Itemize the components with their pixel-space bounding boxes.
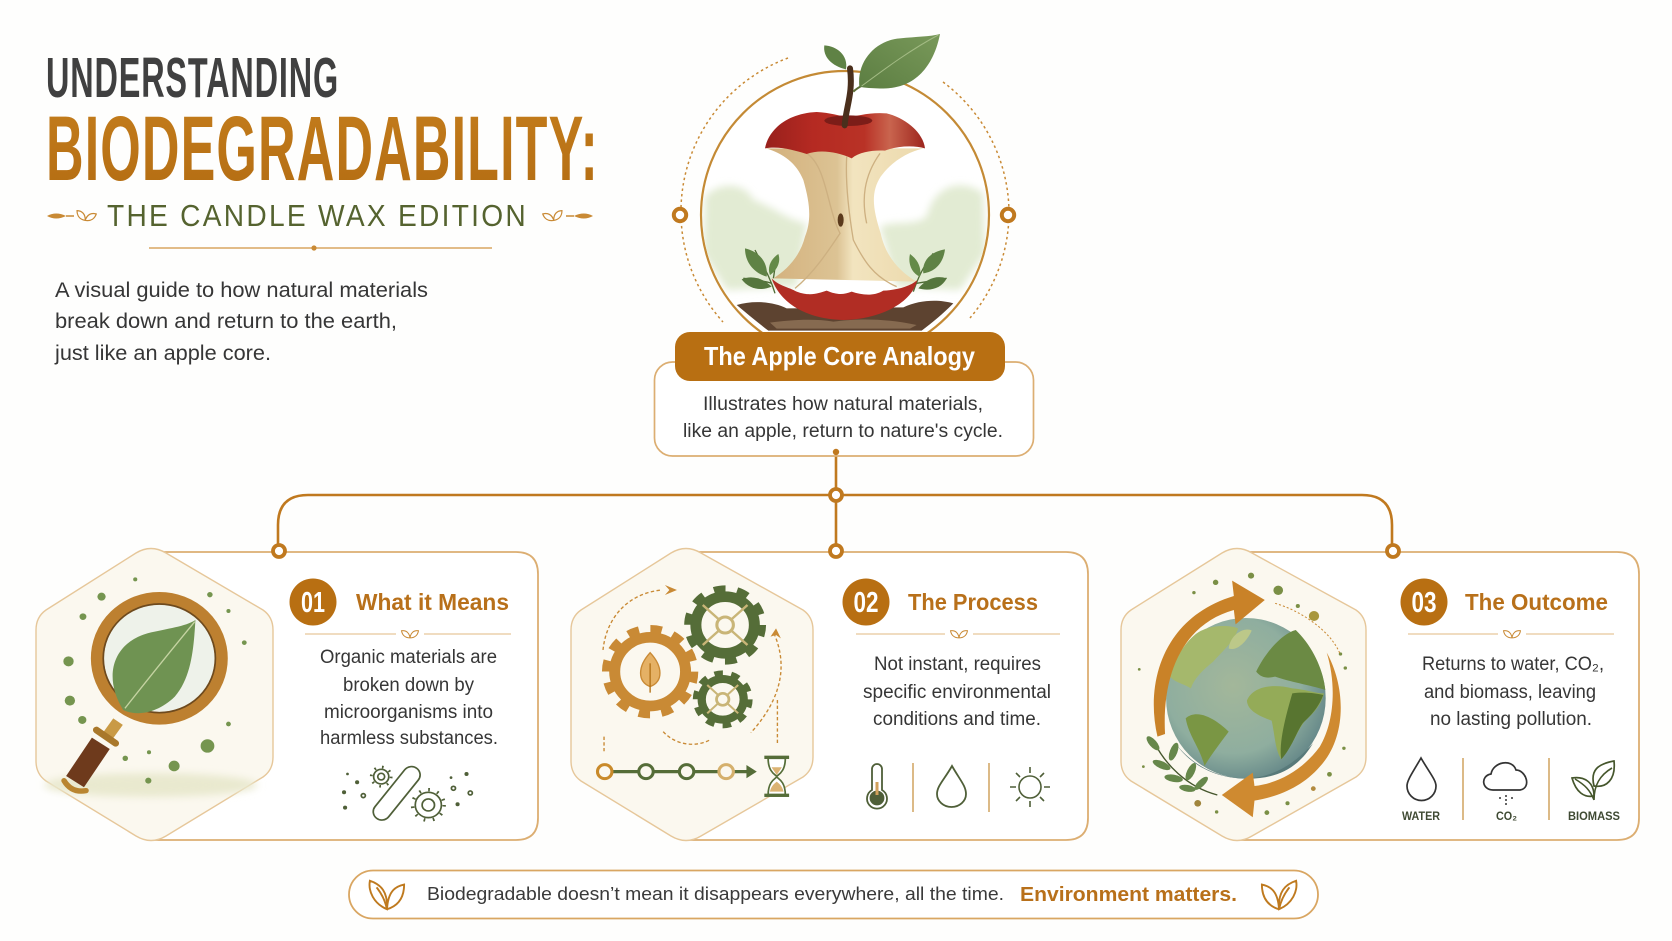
icon: biomass plant: BIOMASS (1568, 809, 1620, 823)
footer icon right (1262, 881, 1296, 909)
footer callout (349, 870, 1318, 918)
icon: sun (1010, 767, 1050, 807)
footer emphasis: Environment matters. (1020, 884, 1237, 906)
panel: the outcome (1121, 548, 1639, 840)
connector dot (833, 449, 839, 455)
subtitle ornament left (47, 211, 96, 222)
dark green gear (688, 589, 762, 661)
body text: microorganisms into (324, 702, 493, 723)
apple circle frame (674, 58, 1014, 359)
illustration: gears and timeline (597, 585, 789, 797)
footer text: Biodegradable doesn’t mean it disappears everywhere, all the time. (427, 883, 1004, 904)
intro paragraph: just like an apple core. (54, 342, 271, 365)
caption text: Illustrates how natural materials, (703, 394, 983, 415)
caption text (683, 394, 1003, 442)
leaf (113, 620, 195, 713)
soil (737, 301, 953, 331)
icon: water (1402, 758, 1440, 823)
body text: specific environmental (863, 682, 1051, 703)
icon: thermometer (867, 764, 887, 809)
body text: Returns to water, CO₂, (1422, 654, 1604, 675)
icon: co2 cloud: CO₂ (1496, 809, 1517, 823)
divider with leaf (305, 631, 511, 638)
heading: What it Means (356, 589, 509, 615)
hexagon background (571, 548, 813, 840)
intro paragraph: break down and return to the earth, (55, 310, 397, 333)
pill heading: The Apple Core Analogy (704, 341, 975, 371)
step number 02: 02 (854, 587, 878, 619)
step number 03 (1400, 578, 1448, 626)
hourglass (764, 756, 789, 797)
body text: Not instant, requires (874, 654, 1041, 675)
globe (1166, 618, 1326, 779)
subtitle: the candle wax edition: THE CANDLE WAX EDITION (107, 198, 528, 233)
caption text: like an apple, return to nature's cycle. (683, 421, 1003, 442)
step number 01: 01 (301, 587, 325, 619)
heading: The Process (908, 589, 1038, 615)
step number 01 (290, 578, 336, 626)
intro paragraph (54, 279, 428, 365)
lens (97, 598, 221, 718)
illustration: globe and cycle arrows (1138, 573, 1347, 817)
core flesh (766, 148, 924, 282)
step number 03: 03 (1412, 587, 1436, 619)
intro paragraph: A visual guide to how natural materials (55, 279, 428, 302)
olive branch (1144, 734, 1217, 795)
body text: conditions and time. (873, 709, 1041, 730)
footer pill (349, 870, 1318, 918)
heading: The Outcome (1465, 589, 1608, 615)
illustration: magnifying glass on leaf (44, 577, 257, 797)
hexagon background (36, 548, 273, 840)
icon: microbes (342, 763, 472, 823)
body text (863, 654, 1051, 730)
panel: apple core analogy (654, 34, 1034, 456)
card outline (1237, 552, 1639, 840)
divider with leaf (856, 631, 1060, 638)
divider (912, 763, 914, 812)
subtitle ornament right (543, 211, 593, 222)
illustration: apple core (703, 34, 985, 331)
connector lines (278, 452, 1392, 551)
icon: co2 cloud (1484, 763, 1527, 823)
sprouts (742, 248, 947, 293)
body text: broken down by (343, 675, 474, 696)
hexagon background (1121, 548, 1366, 840)
small leaf (824, 45, 846, 69)
body text: no lasting pollution. (1430, 709, 1592, 730)
orange gear (606, 629, 694, 714)
icon: biomass plant (1568, 761, 1620, 823)
icon: water: WATER (1402, 809, 1440, 823)
body text: Organic materials are (320, 647, 497, 668)
body text (1422, 654, 1604, 730)
body text (320, 647, 498, 749)
divider (1548, 758, 1550, 820)
connector nodes (273, 489, 1399, 557)
spores (1138, 573, 1347, 815)
panel: what it means (36, 548, 538, 840)
divider with leaf (1408, 631, 1614, 638)
title: understanding: UNDERSTANDING (46, 46, 339, 110)
arrow: bottom cycle (1222, 653, 1341, 817)
apple top skin (765, 112, 925, 158)
body text: and biomass, leaving (1424, 682, 1596, 703)
caption box (654, 362, 1034, 456)
step number 02 (842, 578, 890, 626)
large leaf (859, 34, 940, 88)
caption pill (675, 332, 1005, 381)
title rule (149, 245, 492, 251)
stem (845, 68, 851, 125)
card outline (150, 552, 538, 840)
divider (1462, 758, 1464, 820)
divider (988, 763, 990, 812)
apple bottom skin (772, 278, 917, 320)
title block (46, 46, 599, 251)
body text: harmless substances. (320, 728, 498, 749)
panel: the process (571, 548, 1088, 840)
small green gear (696, 673, 750, 726)
handle (64, 722, 118, 791)
timeline (597, 765, 757, 779)
icon: water drop (937, 766, 966, 807)
footer icon left (370, 881, 404, 909)
arrow: top cycle (1154, 581, 1265, 737)
card outline (686, 552, 1088, 840)
title: biodegradability: BIODEGRADABILITY: (46, 98, 599, 200)
